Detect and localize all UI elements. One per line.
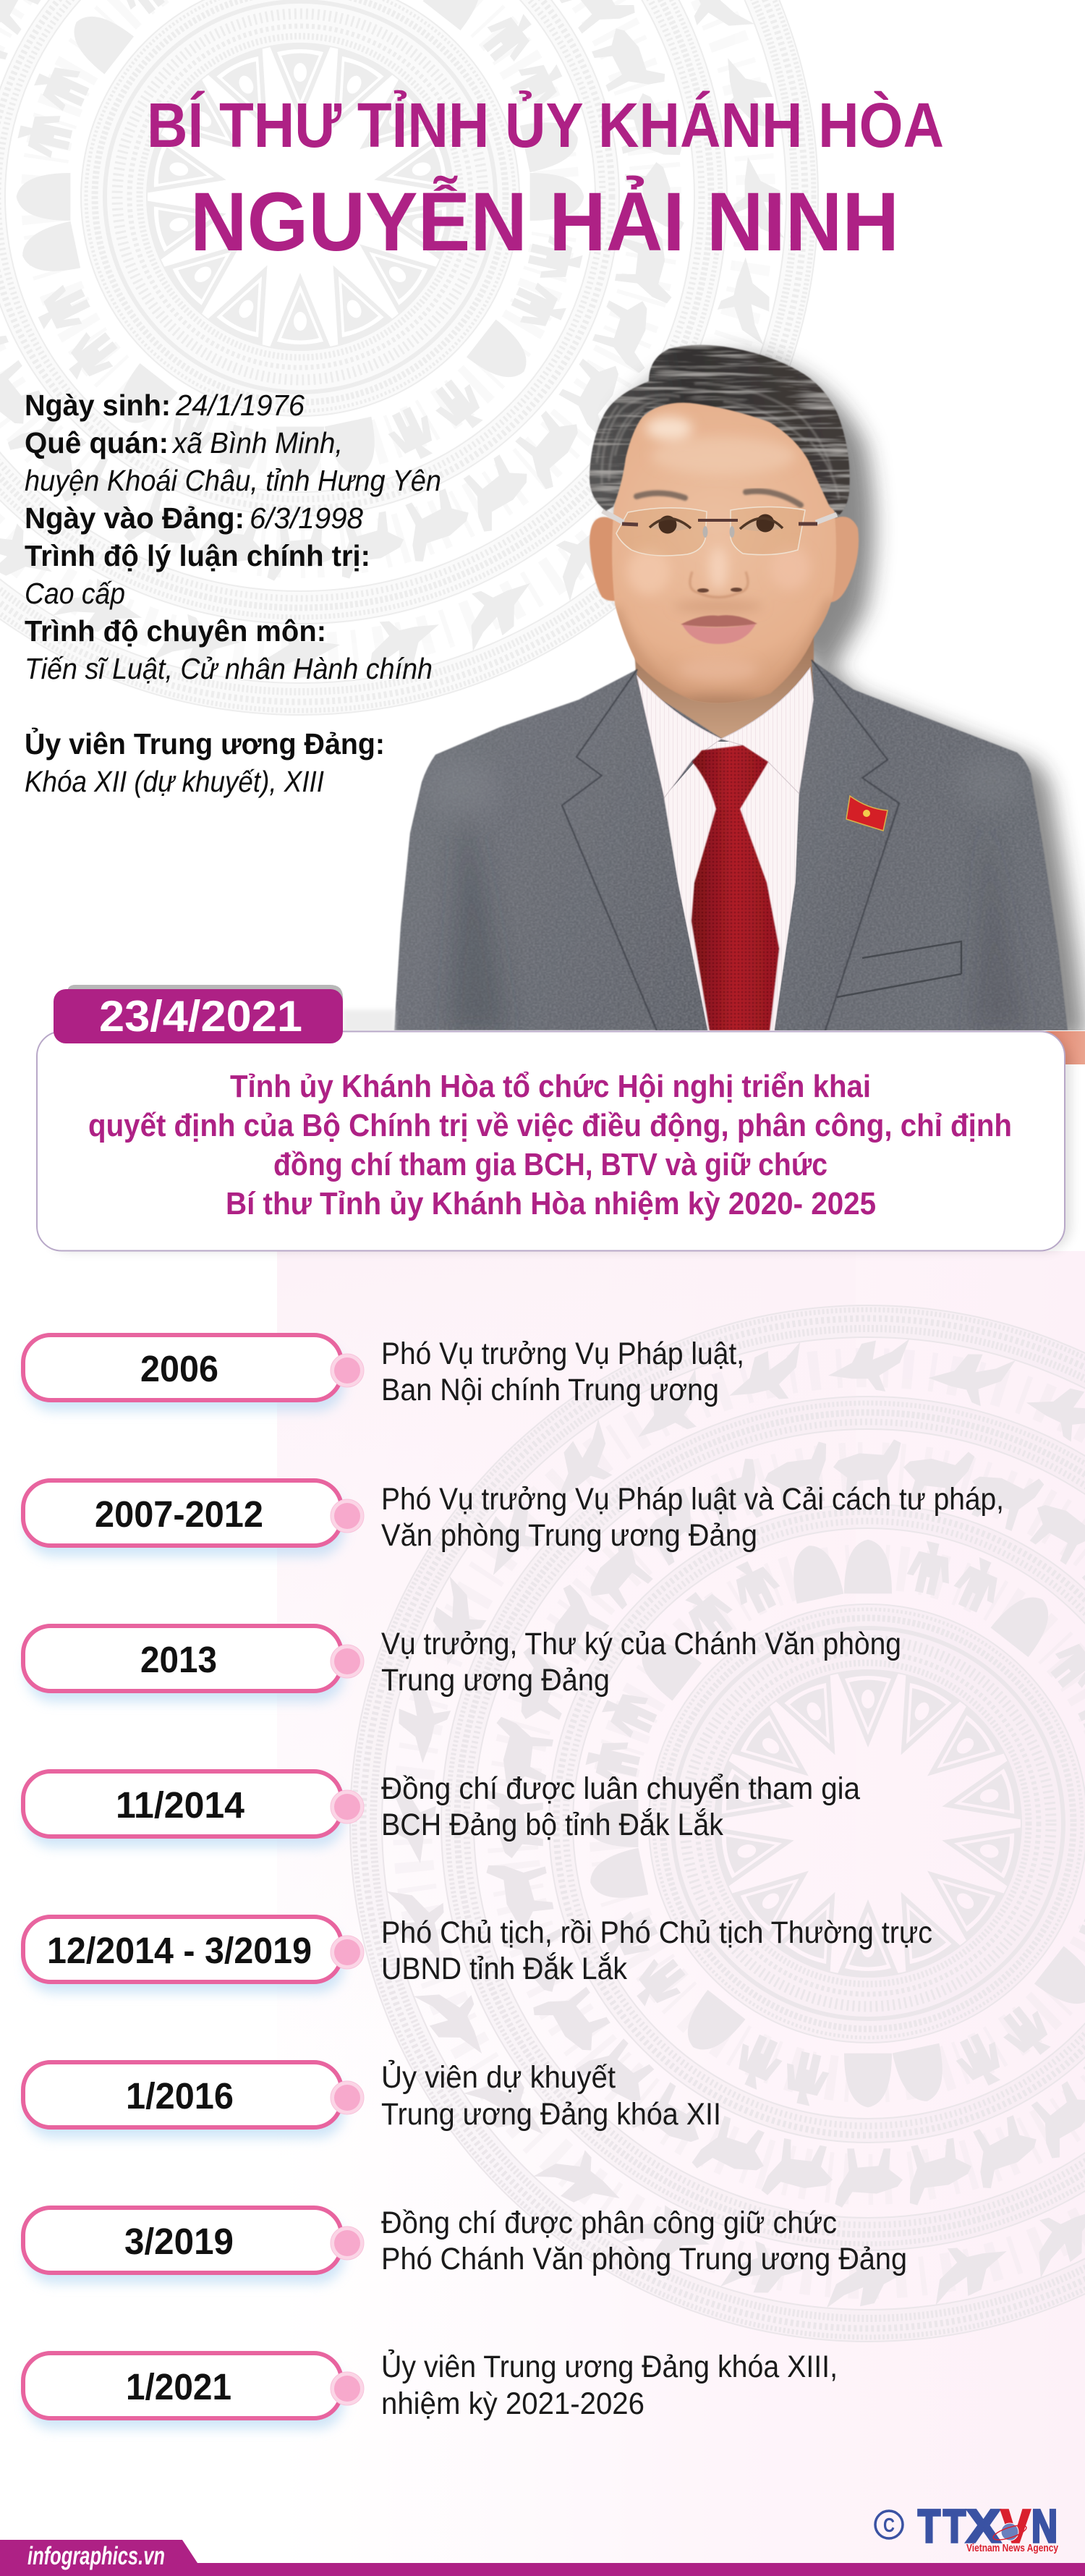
row 11/2014: BCH Đảng bộ tỉnh Đắk Lắk (381, 1808, 723, 1842)
row 2006: Phó Vụ trưởng Vụ Pháp luật, (381, 1336, 744, 1371)
left ear (590, 517, 616, 601)
row 3/2019 (23, 2206, 907, 2284)
logo: TTXVN (875, 2500, 1059, 2554)
political theory level: Cao cấp (25, 577, 125, 610)
date tab (54, 985, 343, 1043)
birth date: Ngày sinh: (25, 389, 171, 422)
row 11/2014: Đồng chí được luân chuyển tham gia (381, 1771, 860, 1806)
row 2007-2012: Phó Vụ trưởng Vụ Pháp luật và Cải cách tư pháp, (381, 1482, 1004, 1517)
biography text block (25, 389, 441, 798)
row 2006: Ban Nội chính Trung ương (381, 1373, 719, 1407)
footer bar (0, 2540, 1085, 2576)
timeline (23, 1335, 1004, 2429)
title line 2: name: NGUYỄN HẢI NINH (190, 176, 899, 268)
panel text: Bí thư Tỉnh ủy Khánh Hòa nhiệm kỳ 2020- 2025 (226, 1186, 876, 1221)
central committee membership: Ủy viên Trung ương Đảng: (25, 727, 385, 760)
date tab shadow (67, 985, 343, 1013)
row 2013 (23, 1626, 901, 1702)
necktie (692, 745, 779, 1030)
title (147, 90, 944, 268)
globe (992, 2522, 1028, 2543)
cast shadow (619, 355, 1085, 1041)
right ear (829, 517, 859, 602)
eyebrows (637, 491, 801, 505)
shirt (663, 742, 799, 1030)
eyes (650, 514, 783, 534)
row 12/2014 - 3/2019 (23, 1915, 932, 1993)
date text: 23/4/2021 (99, 992, 302, 1041)
birth date (25, 389, 305, 422)
jacket (394, 660, 1068, 1030)
hometown: Quê quán: (25, 426, 169, 459)
row 1/2021 (23, 2349, 838, 2429)
wordmark: T (943, 2500, 966, 2552)
pink lower background (277, 1251, 1085, 2563)
row 1/2016: Trung ương Đảng khóa XII (381, 2097, 721, 2132)
copyright mark (875, 2511, 903, 2538)
footer tab and strip (0, 2540, 1085, 2576)
panel shadow (45, 1039, 1071, 1250)
professional level (25, 614, 433, 685)
panel text: quyết định của Bộ Chính trị về việc điều động, phân công, chỉ định (88, 1108, 1012, 1143)
website label: infographics.vn (27, 2542, 165, 2570)
central committee membership (25, 727, 385, 798)
party entry date (25, 501, 363, 535)
orange block behind panel (1045, 1031, 1085, 1064)
hometown (25, 426, 441, 497)
hometown: huyện Khoái Châu, tỉnh Hưng Yên (25, 464, 441, 497)
wordmark: N (1031, 2500, 1058, 2552)
face shading and highlights (615, 417, 832, 716)
row 2013: 2013 (140, 1639, 217, 1680)
lips (681, 615, 757, 644)
political theory level (25, 539, 370, 610)
copyright mark: C (883, 2514, 895, 2536)
row 3/2019: 3/2019 (124, 2221, 234, 2262)
decision panel (37, 1032, 1071, 1250)
panel text: Tỉnh ủy Khánh Hòa tổ chức Hội nghị triển khai (230, 1069, 871, 1104)
row 1/2021: nhiệm kỳ 2021-2026 (381, 2386, 644, 2421)
date tab shape (54, 989, 343, 1043)
wordmark: V (1001, 2500, 1030, 2552)
row 2013: Vụ trưởng, Thư ký của Chánh Văn phòng (381, 1627, 901, 1661)
professional level: Trình độ chuyên môn: (25, 614, 326, 648)
row 12/2014 - 3/2019: 12/2014 - 3/2019 (47, 1930, 312, 1971)
row 2006 (23, 1335, 744, 1411)
row 2007-2012 (23, 1480, 1004, 1556)
jacket folds shading (430, 755, 1027, 1030)
row 1/2021: Ủy viên Trung ương Đảng khóa XIII, (381, 2349, 838, 2384)
jacket lapels (562, 660, 899, 1030)
professional level: Tiến sĩ Luật, Cử nhân Hành chính (25, 652, 433, 685)
central committee membership: Khóa XII (dự khuyết), XIII (25, 765, 324, 798)
portrait photo illustration (394, 345, 1085, 1041)
wordmark (918, 2500, 1058, 2552)
panel text (88, 1069, 1012, 1221)
jacket pocket (837, 941, 961, 997)
row 12/2014 - 3/2019: Phó Chủ tịch, rồi Phó Chủ tịch Thường trực (381, 1915, 932, 1950)
political theory level: Trình độ lý luận chính trị: (25, 539, 370, 572)
wordmark: T (918, 2500, 940, 2552)
panel card (37, 1032, 1065, 1250)
party entry date: 6/3/1998 (250, 501, 363, 535)
eyeglasses (603, 507, 837, 556)
panel text: đồng chí tham gia BCH, BTV và giữ chức (273, 1147, 827, 1182)
party flag pin (846, 796, 888, 831)
shirt shading (691, 917, 780, 1030)
row 2006: 2006 (140, 1348, 218, 1389)
row 1/2016: 1/2016 (126, 2075, 234, 2117)
watermark: top bronze drum (0, 0, 818, 715)
row 1/2016 (23, 2059, 721, 2138)
row 11/2014 (23, 1771, 860, 1847)
soft gray shadow strip near date tab (343, 1009, 395, 1033)
agency name: Vietnam News Agency (966, 2542, 1059, 2554)
row 2013: Trung ương Đảng (381, 1663, 610, 1698)
row 2007-2012: Văn phòng Trung ương Đảng (381, 1518, 757, 1553)
row 1/2016: Ủy viên dự khuyết (381, 2059, 616, 2095)
nose (690, 572, 748, 598)
row 3/2019: Phó Chánh Văn phòng Trung ương Đảng (381, 2242, 907, 2276)
row 2007-2012: 2007-2012 (95, 1494, 263, 1535)
hair (590, 345, 850, 515)
row 11/2014: 11/2014 (116, 1784, 245, 1826)
watermark: bottom bronze drum (350, 1305, 1085, 2342)
face (612, 398, 836, 703)
row 3/2019: Đồng chí được phân công giữ chức (381, 2206, 837, 2240)
title line 1: BÍ THƯ TỈNH ỦY KHÁNH HÒA (147, 90, 944, 161)
row 1/2021: 1/2021 (126, 2366, 231, 2407)
hometown: xã Bình Minh, (171, 426, 343, 459)
neck (634, 637, 814, 740)
row 12/2014 - 3/2019: UBND tỉnh Đắk Lắk (381, 1952, 627, 1986)
birth date: 24/1/1976 (175, 389, 305, 422)
party entry date: Ngày vào Đảng: (25, 501, 244, 535)
wordmark: X (966, 2500, 1000, 2552)
shirt collar (637, 668, 814, 798)
